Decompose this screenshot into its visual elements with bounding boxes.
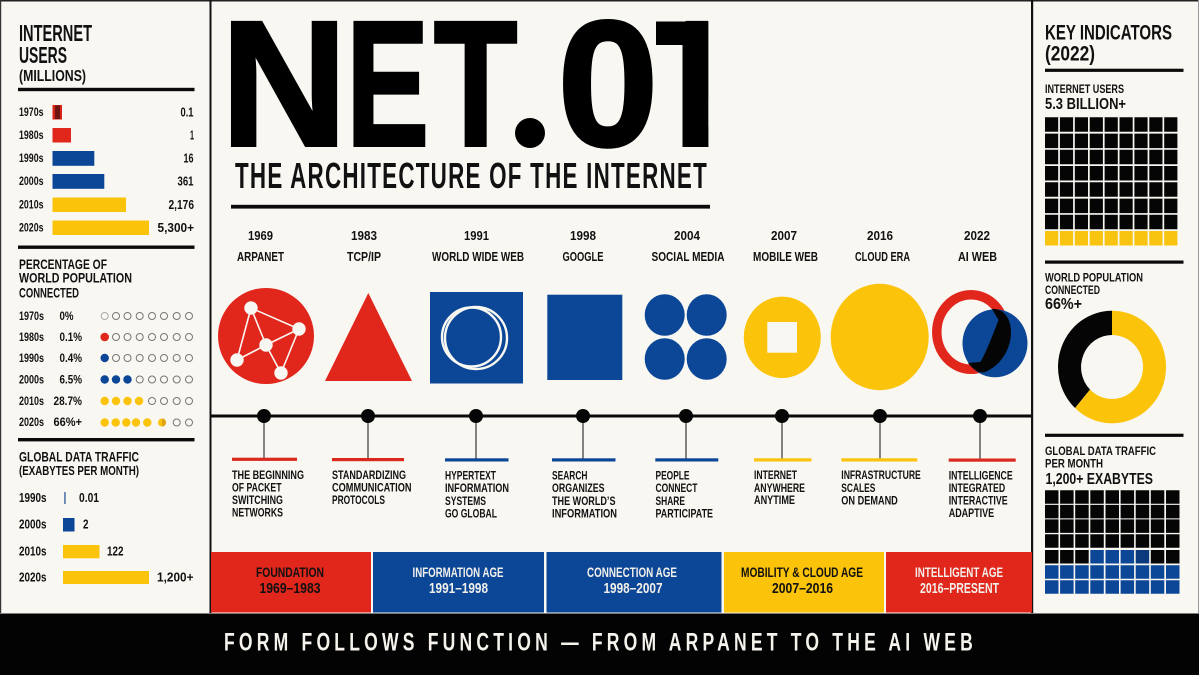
icon: mobile web circle with square bbox=[744, 297, 821, 378]
description: World Wide Web: GO GLOBAL bbox=[445, 506, 497, 520]
milestone: 2016 Cloud Era: 2016 bbox=[867, 228, 893, 243]
heading: global data traffic: (EXABYTES PER MONTH) bbox=[19, 463, 139, 478]
description: ARPANET: SWITCHING bbox=[232, 493, 283, 507]
icon: ARPANET network circle bbox=[218, 288, 314, 384]
era: information age: INFORMATION AGE bbox=[412, 565, 504, 580]
indicator: world population connected: 66%+ bbox=[1045, 296, 1082, 313]
milestone: 2004 Social Media: SOCIAL MEDIA bbox=[652, 249, 725, 264]
description: World Wide Web: SYSTEMS bbox=[445, 494, 486, 508]
panel: global data traffic bbox=[19, 448, 194, 584]
era: mobility and cloud age bbox=[724, 552, 884, 612]
era: intelligent age: 2016–PRESENT bbox=[920, 581, 999, 597]
dot chart: percent connected by decade: 0% bbox=[60, 309, 74, 323]
indicator: world population connected bbox=[1045, 271, 1166, 423]
era: intelligent age bbox=[886, 552, 1032, 612]
heading: internet users: USERS bbox=[19, 42, 67, 68]
milestone: 2004 Social Media bbox=[652, 228, 725, 264]
description: AI web: ADAPTIVE bbox=[949, 506, 994, 520]
heading: internet users bbox=[19, 20, 92, 85]
bar chart: internet users by decade: 2020s bbox=[19, 220, 44, 234]
description: mobile web: INTERNET bbox=[754, 468, 797, 482]
dot chart: percent connected by decade: 1970s bbox=[19, 309, 44, 323]
era: mobility and cloud age: 2007–2016 bbox=[772, 581, 833, 597]
bar chart: internet users by decade: 2000s bbox=[19, 174, 44, 188]
bar chart: data traffic by decade: 2000s bbox=[19, 516, 46, 532]
dot chart: percent connected by decade: 6.5% bbox=[60, 372, 82, 386]
description: World Wide Web bbox=[445, 468, 509, 520]
milestone: 2022 AI Web bbox=[958, 228, 997, 264]
milestone labels bbox=[237, 228, 997, 264]
description: Google: ORGANIZES bbox=[552, 481, 604, 495]
bar chart: internet users by decade: 1990s bbox=[19, 151, 44, 165]
era: intelligent age: INTELLIGENT AGE bbox=[915, 565, 1003, 580]
bar chart: internet users by decade: 2,176 bbox=[168, 197, 194, 212]
era: information age: 1991–1998 bbox=[429, 581, 488, 597]
description: TCP/IP: STANDARDIZING bbox=[332, 468, 406, 482]
heading: key indicators: (2022) bbox=[1045, 42, 1095, 66]
description: ARPANET: NETWORKS bbox=[232, 506, 283, 520]
waffle chart: internet users bbox=[1045, 117, 1177, 246]
bar chart: internet users by decade: 16 bbox=[184, 150, 194, 166]
description: TCP/IP: PROTOCOLS bbox=[332, 493, 385, 507]
era: mobility and cloud age: MOBILITY & CLOUD AGE bbox=[741, 565, 863, 580]
milestone: 1969 ARPANET: 1969 bbox=[248, 228, 273, 243]
milestone: 1998 Google: GOOGLE bbox=[562, 249, 604, 264]
description: mobile web: ANYTIME bbox=[754, 493, 795, 507]
bar chart: internet users by decade: 5,300+ bbox=[158, 220, 194, 235]
bar chart: data traffic by decade: 1990s bbox=[19, 490, 46, 505]
era: foundation: FOUNDATION bbox=[256, 565, 324, 580]
bar chart: internet users by decade bbox=[19, 104, 194, 235]
icon: Google square bbox=[547, 295, 622, 380]
indicator: internet users bbox=[1045, 82, 1177, 246]
dot chart: percent connected by decade: 1980s bbox=[19, 330, 44, 344]
description: cloud era: INFRASTRUCTURE bbox=[841, 468, 921, 482]
description: TCP/IP bbox=[332, 468, 412, 507]
panel: percentage of world population connected bbox=[18, 256, 194, 441]
icon: TCP/IP triangle bbox=[325, 293, 412, 381]
milestone: 1983 TCP/IP: TCP/IP bbox=[347, 249, 381, 264]
heading: internet users: INTERNET bbox=[19, 20, 92, 46]
era: connection age: CONNECTION AGE bbox=[587, 565, 677, 580]
heading: key indicators bbox=[1045, 20, 1172, 66]
dot chart: percent connected by decade: 2000s bbox=[19, 372, 44, 386]
icon: AI web overlapping circles bbox=[937, 295, 1028, 377]
icon: World Wide Web square with rings bbox=[430, 292, 523, 384]
description: ARPANET bbox=[232, 468, 304, 520]
description: social media: PARTICIPATE bbox=[656, 506, 713, 520]
description: cloud era: SCALES bbox=[841, 481, 875, 495]
milestone: 2016 Cloud Era: CLOUD ERA bbox=[855, 249, 910, 264]
indicator: internet users: INTERNET USERS bbox=[1045, 82, 1124, 96]
bar chart: internet users by decade: 361 bbox=[178, 174, 194, 188]
title bbox=[221, 0, 738, 184]
description: AI web: INTEGRATED bbox=[949, 481, 1005, 495]
milestone: 1983 TCP/IP bbox=[347, 228, 381, 264]
milestone: 2007 Mobile Web bbox=[753, 228, 818, 264]
era: foundation: 1969–1983 bbox=[260, 581, 320, 597]
description: TCP/IP: COMMUNICATION bbox=[332, 480, 412, 494]
description: social media bbox=[656, 468, 713, 520]
dot chart: percent connected by decade: 0.4% bbox=[60, 351, 82, 365]
indicator: global data traffic: 1,200+ EXABYTES bbox=[1046, 471, 1153, 488]
description: cloud era: ON DEMAND bbox=[841, 494, 898, 508]
milestone: 1983 TCP/IP: 1983 bbox=[351, 228, 377, 243]
description: AI web bbox=[949, 468, 1013, 520]
description: social media: PEOPLE bbox=[656, 468, 690, 482]
bar chart: data traffic by decade bbox=[19, 490, 194, 584]
description: cloud era bbox=[841, 468, 921, 508]
description: Google bbox=[552, 468, 617, 520]
milestone: 1991 World Wide Web bbox=[432, 228, 524, 264]
heading: percentage connected: PERCENTAGE OF bbox=[19, 256, 107, 272]
description: AI web: INTERACTIVE bbox=[949, 494, 1008, 508]
bar chart: internet users by decade: 1980s bbox=[19, 128, 44, 142]
milestone: 1969 ARPANET bbox=[237, 228, 284, 264]
description: social media: CONNECT bbox=[656, 481, 698, 495]
bar chart: data traffic by decade: 122 bbox=[107, 544, 124, 558]
indicator: global data traffic: GLOBAL DATA TRAFFIC bbox=[1045, 444, 1156, 458]
era: connection age: 1998–2007 bbox=[604, 581, 662, 597]
era: foundation bbox=[211, 552, 371, 612]
milestone: 2022 AI Web: 2022 bbox=[964, 228, 990, 243]
bar chart: data traffic by decade: 0.01 bbox=[79, 490, 99, 505]
dot chart: percent connected by decade: 0.1% bbox=[60, 330, 82, 344]
milestone: 2007 Mobile Web: 2007 bbox=[771, 228, 797, 243]
bar chart: data traffic by decade: 1,200+ bbox=[157, 570, 194, 584]
bar chart: internet users by decade: 1970s bbox=[19, 105, 44, 119]
indicator: world population connected: WORLD POPULATION bbox=[1045, 271, 1143, 285]
panel: key indicators bbox=[1045, 20, 1184, 594]
waffle chart: data traffic bbox=[1045, 490, 1180, 594]
bar chart: data traffic by decade: 2010s bbox=[19, 544, 46, 558]
dot chart: percent connected by decade: 28.7% bbox=[54, 394, 82, 408]
milestone: 1969 ARPANET: ARPANET bbox=[237, 249, 284, 264]
description: Google: SEARCH bbox=[552, 468, 588, 482]
heading: percentage connected bbox=[19, 256, 132, 300]
dot chart: percent connected by decade: 2020s bbox=[19, 415, 44, 429]
milestone: 2016 Cloud Era bbox=[855, 228, 910, 264]
bar chart: data traffic by decade: 2020s bbox=[19, 570, 46, 584]
indicator: global data traffic bbox=[1045, 444, 1180, 594]
era: connection age bbox=[546, 552, 722, 612]
timeline stems and nodes bbox=[257, 409, 987, 459]
milestone: 1998 Google: 1998 bbox=[570, 228, 596, 243]
era: information age bbox=[373, 552, 544, 612]
description: Google: THE WORLD’S bbox=[552, 494, 616, 508]
milestone: 2007 Mobile Web: MOBILE WEB bbox=[753, 249, 818, 264]
panel: internet users bbox=[18, 20, 194, 249]
description: World Wide Web: HYPERTEXT bbox=[445, 468, 496, 482]
milestone: 1991 World Wide Web: WORLD WIDE WEB bbox=[432, 249, 524, 264]
bar chart: internet users by decade: 0.1 bbox=[180, 104, 194, 120]
milestone: 1998 Google bbox=[562, 228, 604, 264]
dot chart: percent connected by decade bbox=[19, 309, 192, 429]
heading: percentage connected: CONNECTED bbox=[19, 284, 79, 300]
indicator: global data traffic: PER MONTH bbox=[1045, 456, 1103, 470]
icon: social media four circles bbox=[645, 294, 727, 380]
dot chart: percent connected by decade: 2010s bbox=[19, 394, 44, 408]
era bands bbox=[211, 552, 1032, 612]
description: mobile web: ANYWHERE bbox=[754, 481, 805, 495]
heading: global data traffic: GLOBAL DATA TRAFFIC bbox=[19, 448, 139, 464]
description: ARPANET: OF PACKET bbox=[232, 480, 282, 494]
description: mobile web bbox=[754, 468, 805, 507]
indicator: world population connected: CONNECTED bbox=[1045, 283, 1100, 297]
description: World Wide Web: INFORMATION bbox=[445, 481, 509, 495]
milestone: 2004 Social Media: 2004 bbox=[674, 228, 701, 243]
icon: cloud era circle bbox=[831, 284, 929, 390]
dot chart: percent connected by decade: 1990s bbox=[19, 351, 44, 365]
indicator: internet users: 5.3 BILLION+ bbox=[1045, 96, 1126, 113]
bar chart: internet users by decade: 2010s bbox=[19, 198, 44, 212]
bar chart: internet users by decade: 1 bbox=[190, 128, 194, 142]
donut chart: 66 percent connected bbox=[1058, 311, 1166, 423]
description: Google: INFORMATION bbox=[552, 506, 617, 520]
footer banner bbox=[0, 614, 1199, 675]
timeline bbox=[211, 409, 1031, 462]
description: ARPANET: THE BEGINNING bbox=[232, 468, 304, 482]
description: social media: SHARE bbox=[656, 494, 685, 508]
dot chart: percent connected by decade: 66%+ bbox=[54, 415, 82, 429]
bar chart: data traffic by decade: 2 bbox=[83, 516, 88, 532]
heading: internet users: (MILLIONS) bbox=[19, 68, 86, 85]
title: . bbox=[520, 46, 540, 170]
milestone: 1991 World Wide Web: 1991 bbox=[464, 228, 489, 243]
milestone: 2022 AI Web: AI WEB bbox=[958, 249, 997, 264]
heading: percentage connected: WORLD POPULATION bbox=[19, 270, 132, 286]
heading: global data traffic bbox=[19, 448, 139, 478]
description: AI web: INTELLIGENCE bbox=[949, 468, 1013, 482]
subtitle: THE ARCHITECTURE OF THE INTERNET bbox=[235, 155, 708, 196]
